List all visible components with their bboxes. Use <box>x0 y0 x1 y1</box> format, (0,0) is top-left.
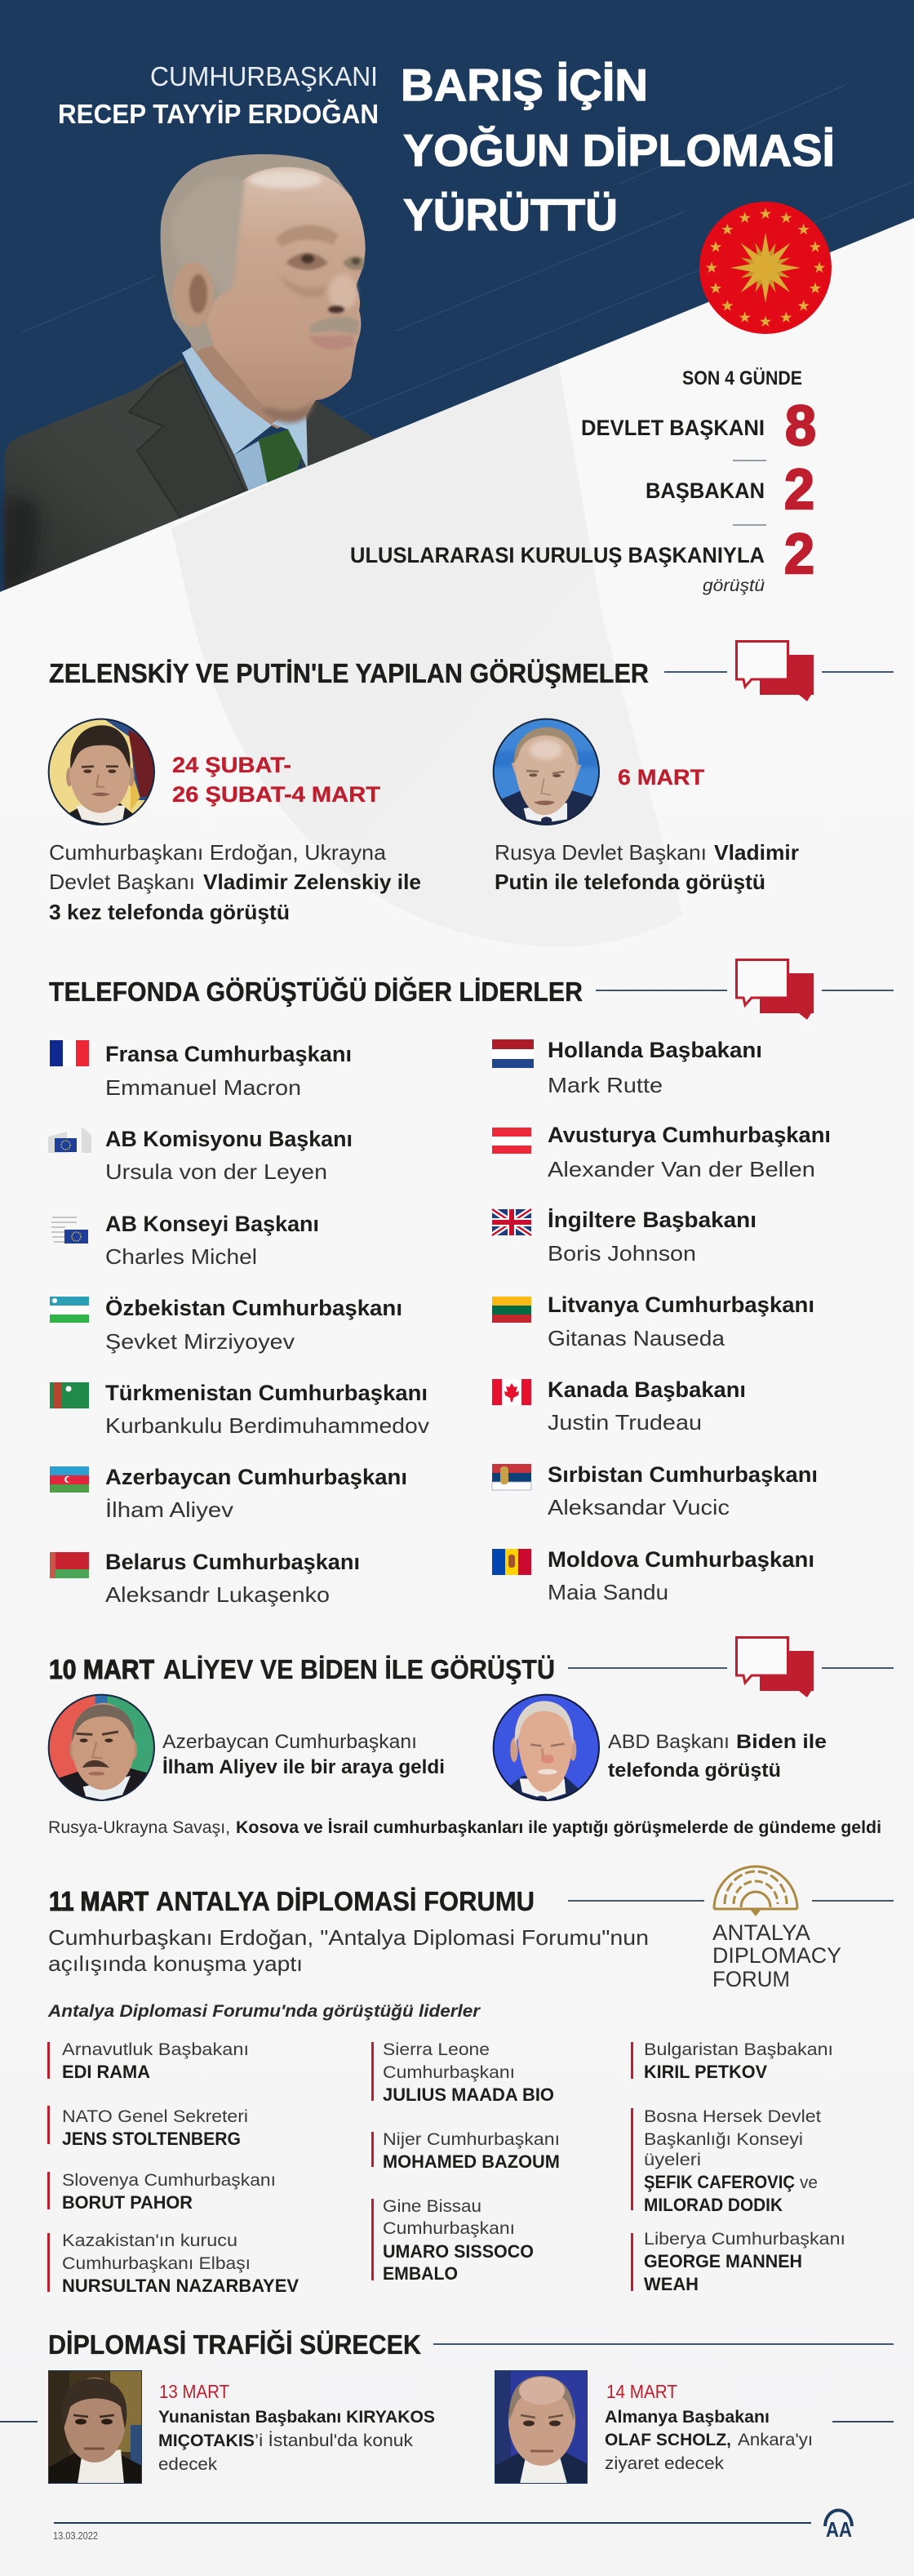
leader: Canada: Kanada Başbakanı <box>548 1377 746 1402</box>
leader: Nursultan Nazarbayev: NURSULTAN NAZARBAYEV <box>62 2276 299 2296</box>
text: Scholz visit: Ankara'yı <box>738 2431 813 2449</box>
portrait: Biden <box>491 1692 602 1803</box>
leader: Julius Maada Bio: JULIUS MAADA BIO <box>383 2084 554 2105</box>
logo: Antalya Diplomacy Forum: FORUM <box>712 1967 790 1991</box>
text: Zelenskiy calls: 3 kez telefonda görüştü <box>49 900 290 924</box>
leader: Bosnia Herzegovina council: ŞEFIK CAFEROVIÇ <box>644 2172 795 2192</box>
text: Mitsotakis visit <box>158 2381 435 2474</box>
photo: Mitsotakis <box>48 2370 142 2484</box>
leader: Edi Rama: Arnavutluk Başbakanı <box>62 2040 249 2059</box>
stat: uluslararası kuruluş başkanı 2: 2 <box>784 522 814 585</box>
leader: Jens Stoltenberg: JENS STOLTENBERG <box>62 2129 241 2149</box>
leader: Belarus <box>50 1550 360 1607</box>
flag: EU Commission <box>48 1127 91 1153</box>
leader: Jens Stoltenberg: NATO Genel Sekreteri <box>62 2107 248 2126</box>
title: YOĞUN DİPLOMASİ <box>403 125 835 176</box>
date: Zelenskiy calls: 26 ŞUBAT-4 MART <box>172 782 381 807</box>
leader: Netherlands: Mark Rutte <box>548 1073 663 1097</box>
note: Kosovo and Israel talks: Rusya-Ukrayna Savaşı, <box>48 1818 230 1837</box>
leader: EU Commission: Ursula von der Leyen <box>105 1159 327 1184</box>
icon: chat bubbles <box>736 1638 814 1697</box>
leader: Lithuania <box>492 1292 814 1350</box>
text: Zelenskiy calls <box>49 840 421 924</box>
stat: devlet başkanı 8: DEVLET BAŞKANI <box>581 416 765 440</box>
stat footnote: görüştü <box>703 576 765 595</box>
text: Scholz visit: Almanya Başbakanı <box>605 2408 770 2427</box>
leader: Nursultan Nazarbayev: Kazakistan'ın kurucu <box>62 2231 237 2250</box>
leader: France: Emmanuel Macron <box>105 1075 301 1100</box>
flag: United Kingdom <box>492 1209 531 1235</box>
leader: Umaro Sissoco Embalo: UMARO SISSOCO <box>383 2241 534 2262</box>
text: Putin call <box>495 840 799 894</box>
date: Zelenskiy calls <box>172 753 381 807</box>
leader: France: Fransa Cumhurbaşkanı <box>105 1042 352 1066</box>
section: diplomatic traffic continues <box>0 2329 894 2484</box>
flag: Uzbekistan <box>50 1297 89 1323</box>
portrait: Aliyev <box>47 1692 158 1803</box>
leader: Moldova <box>492 1547 814 1604</box>
leader: George Manneh Weah: Liberya Cumhurbaşkanı <box>644 2230 845 2249</box>
text: Mitsotakis visit: edecek <box>158 2455 218 2474</box>
hero kicker: Cumhurbaşkanı Recep Tayyip Erdoğan: RECEP TAYYİP ERDOĞAN <box>58 99 379 129</box>
leader: Bosnia Herzegovina council: MILORAD DODIK <box>644 2195 783 2215</box>
leader: Mohamed Bazoum <box>371 2130 560 2172</box>
text: Mitsotakis visit: ’i İstanbul'da konuk <box>255 2431 414 2450</box>
text: opening speech: açılışında konuşma yaptı <box>48 1951 303 1976</box>
text: Zelenskiy calls: Devlet Başkanı <box>49 870 195 894</box>
leader: Moldova: Maia Sandu <box>548 1580 668 1604</box>
date: 13.03.2022 <box>53 2529 98 2542</box>
text: Scholz visit <box>605 2381 813 2473</box>
leader: Azerbaijan: İlham Aliyev <box>105 1497 233 1522</box>
leader: EU Council <box>51 1212 319 1269</box>
leader: Bosnia Herzegovina council <box>631 2107 821 2215</box>
hero kicker: Cumhurbaşkanı Recep Tayyip Erdoğan <box>58 61 379 129</box>
leader: Azerbaijan: Azerbaycan Cumhurbaşkanı <box>105 1465 407 1489</box>
hero panel: navy diagonal banner <box>0 0 914 592</box>
leader: Lithuania: Litvanya Cumhurbaşkanı <box>548 1292 814 1317</box>
portrait: Zelenskiy <box>47 716 158 827</box>
leader: Mohamed Bazoum: MOHAMED BAZOUM <box>383 2151 560 2172</box>
flag: Azerbaijan <box>50 1466 89 1493</box>
stat: başbakan 2: 2 <box>784 457 814 521</box>
leader: EU Council: Charles Michel <box>105 1244 257 1269</box>
title: BARIŞ İÇİN <box>401 60 648 110</box>
text: Mitsotakis visit: MIÇOTAKIS <box>158 2431 255 2450</box>
heading: 10 MART <box>49 1654 154 1684</box>
leader: Serbia <box>492 1462 818 1519</box>
date: Putin call: 6 MART <box>618 765 705 790</box>
flag: Netherlands <box>492 1039 534 1068</box>
flag: EU Council <box>51 1217 88 1244</box>
section: other leaders called <box>48 960 894 1607</box>
text: opening speech: Cumhurbaşkanı Erdoğan, "Antalya Diplomasi Forumu"nun <box>48 1925 649 1950</box>
leader: Austria: Alexander Van der Bellen <box>548 1157 815 1181</box>
icon: chat bubbles <box>736 642 814 701</box>
leader: United Kingdom <box>492 1208 756 1266</box>
leader: Umaro Sissoco Embalo: Cumhurbaşkanı <box>383 2219 515 2238</box>
stat: devlet başkanı 8: 8 <box>785 394 816 457</box>
leader: Borut Pahor: Slovenya Cumhurbaşkanı <box>62 2171 276 2190</box>
photo: Scholz <box>495 2370 588 2484</box>
logo: Anadolu Agency <box>825 2510 852 2542</box>
logo: Anadolu Agency: AA <box>826 2517 852 2542</box>
flag: Lithuania <box>492 1297 531 1323</box>
panel: meeting statistics <box>350 367 816 595</box>
heading: ALİYEV VE BİDEN İLE GÖRÜŞTÜ <box>163 1654 555 1684</box>
icon: presidential emblem <box>699 202 832 334</box>
text: Aliyev meeting: Azerbaycan Cumhurbaşkanı <box>162 1731 417 1753</box>
leader: Kiril Petkov: Bulgaristan Başbakanı <box>644 2040 833 2059</box>
leader: George Manneh Weah <box>631 2230 845 2294</box>
title <box>401 60 835 240</box>
leader: Moldova: Moldova Cumhurbaşkanı <box>548 1547 814 1572</box>
leader: Bosnia Herzegovina council: üyeleri <box>644 2151 701 2169</box>
leader: Nursultan Nazarbayev <box>47 2231 299 2296</box>
heading: 11 MART <box>49 1886 149 1916</box>
leader: Bosnia Herzegovina council: ve <box>800 2173 818 2192</box>
leader: Borut Pahor <box>47 2171 276 2213</box>
leader: Nursultan Nazarbayev: Cumhurbaşkanı Elbaşı <box>62 2254 251 2273</box>
section: 10 March Aliyev and Biden <box>47 1638 894 1837</box>
leader: Julius Maada Bio: Cumhurbaşkanı <box>383 2063 515 2082</box>
leader: Edi Rama: EDI RAMA <box>62 2062 150 2082</box>
leader: Canada <box>492 1377 746 1435</box>
heading: DİPLOMASİ TRAFİĞİ SÜRECEK <box>48 2329 421 2360</box>
leader: George Manneh Weah: WEAH <box>644 2274 699 2294</box>
section: 11 March Antalya Diplomacy Forum <box>47 1866 894 2296</box>
leader: Lithuania: Gitanas Nauseda <box>548 1326 725 1350</box>
footer <box>53 2510 852 2542</box>
leader: Kiril Petkov: KIRIL PETKOV <box>644 2062 767 2082</box>
hero kicker: Cumhurbaşkanı Recep Tayyip Erdoğan: CUMHURBAŞKANI <box>150 61 378 91</box>
leader: Belarus: Belarus Cumhurbaşkanı <box>105 1550 360 1574</box>
leader: Uzbekistan <box>50 1296 402 1354</box>
leader: United Kingdom: İngiltere Başbakanı <box>548 1208 756 1232</box>
subheading: forum leaders: Antalya Diplomasi Forumu'nda görüştüğü liderler <box>47 2002 481 2021</box>
leader: Uzbekistan: Özbekistan Cumhurbaşkanı <box>105 1296 402 1320</box>
leader: Netherlands: Hollanda Başbakanı <box>548 1038 762 1062</box>
leader: Julius Maada Bio <box>371 2040 554 2105</box>
text: Biden call: ABD Başkanı <box>608 1731 730 1753</box>
text: Mitsotakis visit: 13 MART <box>159 2381 229 2402</box>
leader: Kiril Petkov <box>631 2040 833 2082</box>
heading: ZELENSKİY VE PUTİN'LE YAPILAN GÖRÜŞMELER <box>49 658 649 688</box>
stat: uluslararası kuruluş başkanı 2: ULUSLARARASI KURULUŞ BAŞKANIYLA <box>350 543 765 567</box>
logo: Antalya Diplomacy Forum <box>712 1866 841 1991</box>
text: Zelenskiy calls: Vladimir Zelenskiy ile <box>203 870 421 894</box>
leader: Serbia: Sırbistan Cumhurbaşkanı <box>548 1462 818 1487</box>
leader: Canada: Justin Trudeau <box>548 1410 702 1435</box>
note: Kosovo and Israel talks: Kosova ve İsrail cumhurbaşkanları ile yaptığı görüşmelerde de gündeme geldi <box>236 1818 881 1837</box>
icon: chat bubbles <box>736 960 814 1020</box>
text: Putin call: Vladimir <box>714 840 799 865</box>
flag: Moldova <box>492 1549 531 1575</box>
leader: Umaro Sissoco Embalo: EMBALO <box>383 2263 458 2284</box>
leader: Bosnia Herzegovina council: Bosna Hersek Devlet <box>644 2107 821 2126</box>
leader: Mohamed Bazoum: Nijer Cumhurbaşkanı <box>383 2130 560 2149</box>
title: YÜRÜTTÜ <box>403 189 618 240</box>
leader: EU Commission <box>48 1127 353 1184</box>
leader: Austria: Avusturya Cumhurbaşkanı <box>548 1123 831 1147</box>
leader: Umaro Sissoco Embalo: Gine Bissau <box>383 2197 481 2216</box>
leader: Borut Pahor: BORUT PAHOR <box>62 2192 193 2213</box>
leader: Austria <box>492 1123 831 1181</box>
leader: Serbia: Aleksandar Vucic <box>548 1495 730 1519</box>
leader: Julius Maada Bio: Sierra Leone <box>383 2040 490 2059</box>
text: Mitsotakis visit: Yunanistan Başbakanı KIRYAKOS <box>158 2408 435 2427</box>
flag: France <box>50 1040 89 1066</box>
leader: Bosnia Herzegovina council: Başkanlığı Konseyi <box>644 2130 803 2149</box>
text: Scholz visit: OLAF SCHOLZ, <box>605 2431 731 2449</box>
stat: başbakan 2 <box>646 457 814 521</box>
logo: Antalya Diplomacy Forum: DIPLOMACY <box>712 1943 841 1968</box>
text: Putin call: Putin ile telefonda görüştü <box>495 870 765 894</box>
logo: Antalya Diplomacy Forum: ANTALYA <box>712 1920 810 1945</box>
text: Aliyev meeting <box>162 1731 445 1778</box>
stat caption: SON 4 GÜNDE <box>682 367 802 389</box>
leader: Azerbaijan <box>50 1465 407 1522</box>
text: Biden call: Biden ile <box>736 1731 827 1753</box>
text: Scholz visit: 14 MART <box>606 2381 677 2402</box>
leader: EU Council: AB Konseyi Başkanı <box>105 1212 319 1236</box>
flag: Turkmenistan <box>50 1382 89 1408</box>
portrait: Putin <box>491 716 602 827</box>
text: Zelenskiy calls: Cumhurbaşkanı Erdoğan, Ukrayna <box>49 840 387 865</box>
heading: TELEFONDA GÖRÜŞTÜĞÜ DİĞER LİDERLER <box>49 977 583 1007</box>
leader: Turkmenistan: Kurbankulu Berdimuhammedov <box>105 1413 429 1438</box>
flag: Belarus <box>50 1552 89 1578</box>
leader: Umaro Sissoco Embalo <box>371 2197 534 2284</box>
stat: devlet başkanı 8 <box>581 394 816 457</box>
leader: Uzbekistan: Şevket Mirziyoyev <box>105 1329 295 1354</box>
flag: Serbia <box>492 1464 531 1490</box>
leader: Netherlands <box>492 1038 762 1097</box>
heading: ANTALYA DİPLOMASİ FORUMU <box>156 1886 535 1916</box>
text: Scholz visit: ziyaret edecek <box>605 2454 725 2473</box>
leader: Edi Rama <box>47 2040 249 2082</box>
flag: Canada <box>492 1379 531 1405</box>
text: Aliyev meeting: İlham Aliyev ile bir araya geldi <box>162 1756 445 1778</box>
text: Biden call: telefonda görüştü <box>608 1760 781 1782</box>
leader: Belarus: Aleksandr Lukaşenko <box>105 1582 330 1607</box>
stat: başbakan 2: BAŞBAKAN <box>646 478 765 503</box>
leader: Turkmenistan <box>50 1381 429 1438</box>
leader: France <box>50 1040 352 1100</box>
text: Putin call: Rusya Devlet Başkanı <box>495 840 707 865</box>
leader: Turkmenistan: Türkmenistan Cumhurbaşkanı <box>105 1381 428 1405</box>
section: Zelenskiy and Putin talks <box>47 642 894 924</box>
flag: Austria <box>492 1128 531 1154</box>
photo: Recep Tayyip Erdoğan <box>4 154 384 589</box>
leader: Jens Stoltenberg <box>47 2106 248 2149</box>
leader: United Kingdom: Boris Johnson <box>548 1241 696 1266</box>
leader: EU Commission: AB Komisyonu Başkanı <box>105 1127 353 1151</box>
text: opening speech <box>48 1925 649 1976</box>
date: Zelenskiy calls: 24 ŞUBAT- <box>172 753 291 777</box>
leader: George Manneh Weah: GEORGE MANNEH <box>644 2251 802 2271</box>
text: Biden call <box>608 1731 827 1782</box>
stat: uluslararası kuruluş başkanı 2 <box>350 522 814 585</box>
